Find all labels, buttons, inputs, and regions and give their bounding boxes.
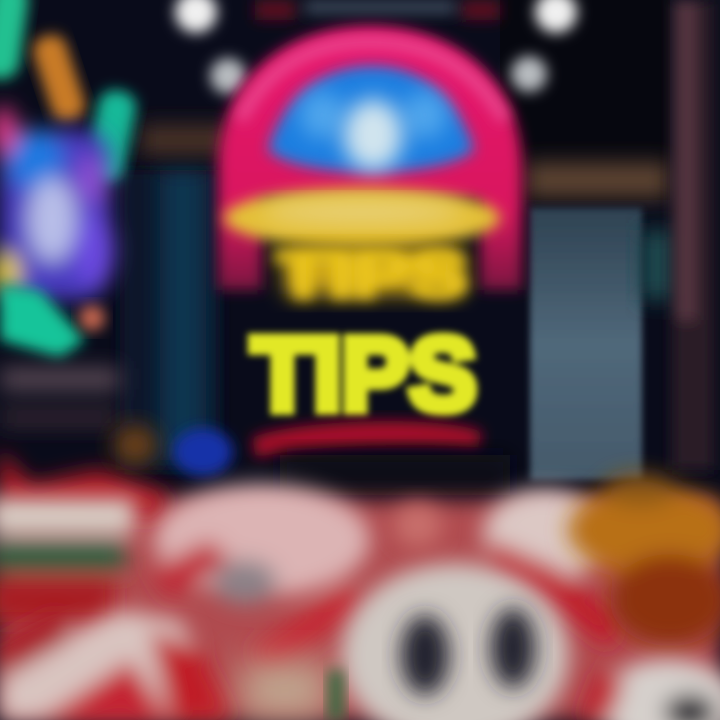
pale blue sides [300,91,447,139]
wall beams [140,125,670,198]
ceiling lights [175,0,577,94]
white centre glow [343,99,403,171]
right pillar [672,0,714,470]
white ball with eyes [328,503,569,720]
arch highlight [240,42,505,120]
teal glow beside panel [640,230,676,300]
neon green pill [0,0,31,82]
tan lower centre [240,660,330,720]
lower grey stripes [0,368,120,426]
dark foreground shadow [280,455,510,495]
green edge of ball [328,670,344,720]
right striped candy [483,489,620,650]
small orange glow [79,305,105,331]
lime lower word: TIPS [252,317,476,433]
candy foreground [0,425,720,720]
striped candy left [0,498,135,622]
grey-blue door panel [530,208,642,480]
red top edge left [0,450,170,520]
multicoloured blob [0,106,115,300]
right eye [491,608,535,688]
blue base glow [173,428,233,476]
banner highlight [262,200,462,224]
orange accent left [113,425,157,465]
neon arch sign [218,26,522,458]
red underline bar [252,421,482,458]
lower-left white and red candy [0,610,235,720]
pink candy centre-left [150,484,370,675]
neon teal pill [83,87,139,185]
lower right ball [580,659,720,720]
candy base [0,500,720,720]
yellow upper word [285,248,461,294]
ball body [341,563,569,720]
neon orange pill [29,31,89,125]
left eye [401,615,449,695]
red tip above ball [394,503,442,547]
left neon signage [0,0,139,426]
pink outer arch [218,26,522,290]
yellow banner [224,188,500,248]
blue inner arc [268,66,474,172]
green neon band [0,285,85,358]
upper word text: TIPS [277,241,467,310]
golden snack pile [568,474,720,646]
